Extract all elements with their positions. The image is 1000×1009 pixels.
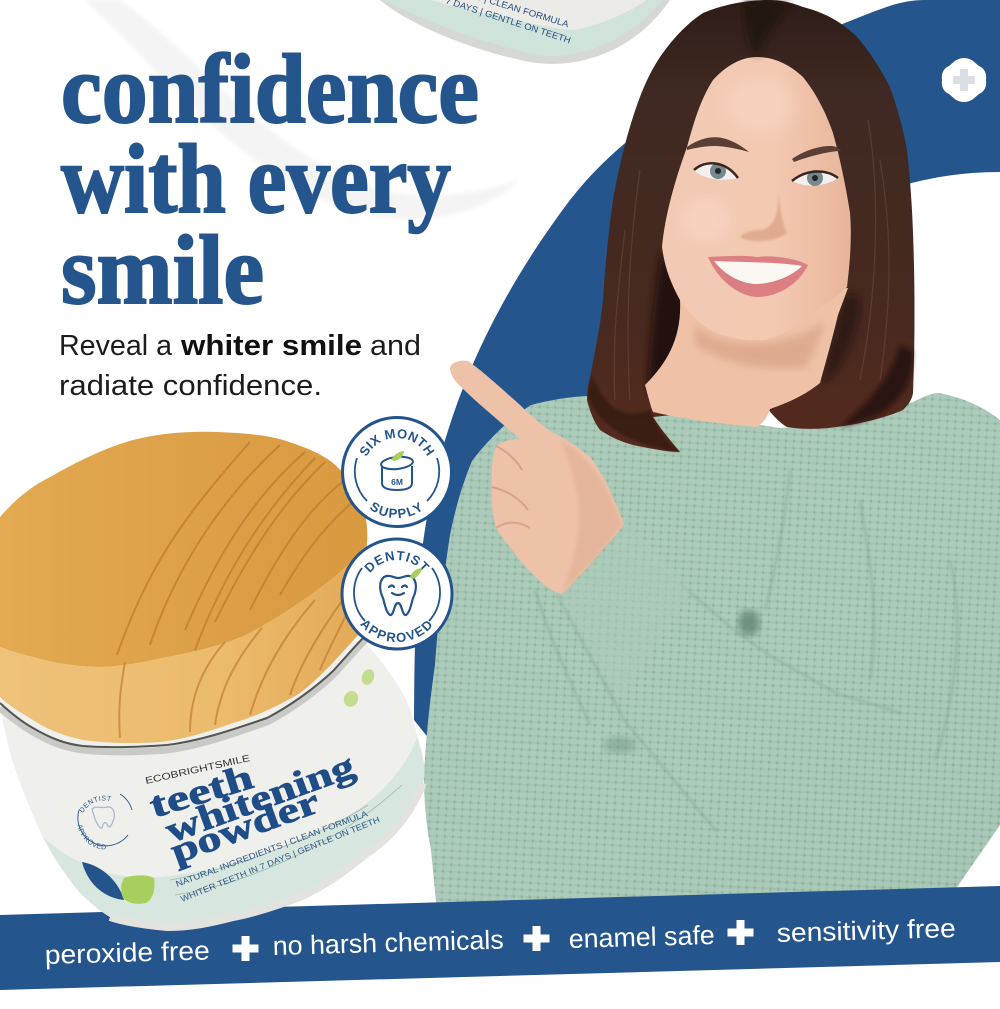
hand <box>450 361 624 594</box>
icon: smiling tooth <box>380 568 422 615</box>
label text: teeth <box>145 756 258 826</box>
label: dentist approved stamp: APPROVED <box>77 824 106 850</box>
hair dark ends <box>588 375 680 452</box>
subheading <box>59 330 421 402</box>
heading: with every <box>61 125 451 234</box>
subheading: and <box>370 330 421 362</box>
finger creases <box>492 446 530 528</box>
heading: confidence <box>61 35 479 144</box>
hair part <box>745 0 790 57</box>
neck shadow <box>695 320 825 369</box>
jar bottom edge <box>110 783 423 927</box>
banner labels: enamel safe <box>568 920 715 954</box>
banner labels: no harsh chemicals <box>272 925 504 961</box>
teeth <box>714 261 802 284</box>
jar glass rim <box>0 640 365 752</box>
badge: dentist approved <box>340 538 454 650</box>
subheading: Reveal a <box>59 330 173 362</box>
label text: powder <box>165 781 324 872</box>
label tagline: WHITER TEETH IN 7 DAYS | GENTLE ON TEETH <box>179 814 381 904</box>
background swoosh <box>85 0 520 219</box>
forehead highlight <box>724 77 796 133</box>
badge: six month supply <box>341 416 450 528</box>
badge inner arcs <box>354 568 440 621</box>
hair <box>587 0 914 452</box>
benefit banner <box>0 886 1000 990</box>
cuff highlight <box>557 520 690 700</box>
label text: whitening <box>160 745 360 851</box>
badge top text: DENTIST <box>364 550 430 573</box>
sweater knit texture <box>424 393 1000 925</box>
woman <box>424 0 1000 925</box>
label tagline: NATURAL INGREDIENTS | CLEAN FORMULA <box>174 808 369 889</box>
label: dentist approved stamp: DENTIST <box>79 796 112 813</box>
heading: smile <box>61 216 264 325</box>
label green leaf <box>121 875 155 904</box>
sweater folds <box>535 470 957 831</box>
jar: large product <box>0 432 427 931</box>
label: dentist approved stamp <box>77 794 132 850</box>
subheading: whiter smile <box>180 330 362 362</box>
label leaves <box>82 862 124 900</box>
banner labels <box>44 913 956 970</box>
sweater body <box>424 393 1000 925</box>
lid top <box>0 432 367 667</box>
wood grain <box>117 442 362 738</box>
hand shading <box>560 440 622 594</box>
jar side icons <box>341 667 376 709</box>
hair strands <box>614 120 889 400</box>
blue curved background shape <box>414 0 1000 760</box>
label text <box>144 745 360 872</box>
subheading: radiate confidence. <box>59 370 322 402</box>
lower crease shadow <box>604 737 636 753</box>
top jar (cropped) <box>380 0 670 64</box>
heading <box>61 35 479 325</box>
face <box>662 57 851 340</box>
label text: ECOBRIGHTSMILE <box>144 753 251 787</box>
band lines <box>170 785 402 895</box>
jar tinted band <box>43 737 425 927</box>
badge bottom text: APPROVED <box>360 620 432 642</box>
jar body <box>0 640 425 927</box>
lips <box>708 256 808 297</box>
badge bottom text: SUPPLY <box>370 502 421 518</box>
neck <box>645 288 848 427</box>
eyebrows <box>687 137 841 162</box>
cheek highlight <box>679 198 731 242</box>
nose shadow <box>740 190 787 241</box>
icon: mini jar: 6M <box>391 477 403 487</box>
badge inner arcs <box>355 458 439 501</box>
jar rim shadow <box>0 636 365 747</box>
banner labels: sensitivity free <box>776 913 956 948</box>
arm crease shadow <box>738 610 760 636</box>
lid side <box>0 543 367 743</box>
hair right dark ends <box>840 345 913 427</box>
hair shadow right <box>822 295 860 385</box>
icon: plus flower badge <box>942 58 986 102</box>
eyes <box>694 163 838 186</box>
hair shadow left <box>648 250 700 405</box>
badge top text: SIX MONTH <box>360 428 434 456</box>
icon: plus separators <box>232 920 754 961</box>
banner labels: peroxide free <box>44 935 210 970</box>
